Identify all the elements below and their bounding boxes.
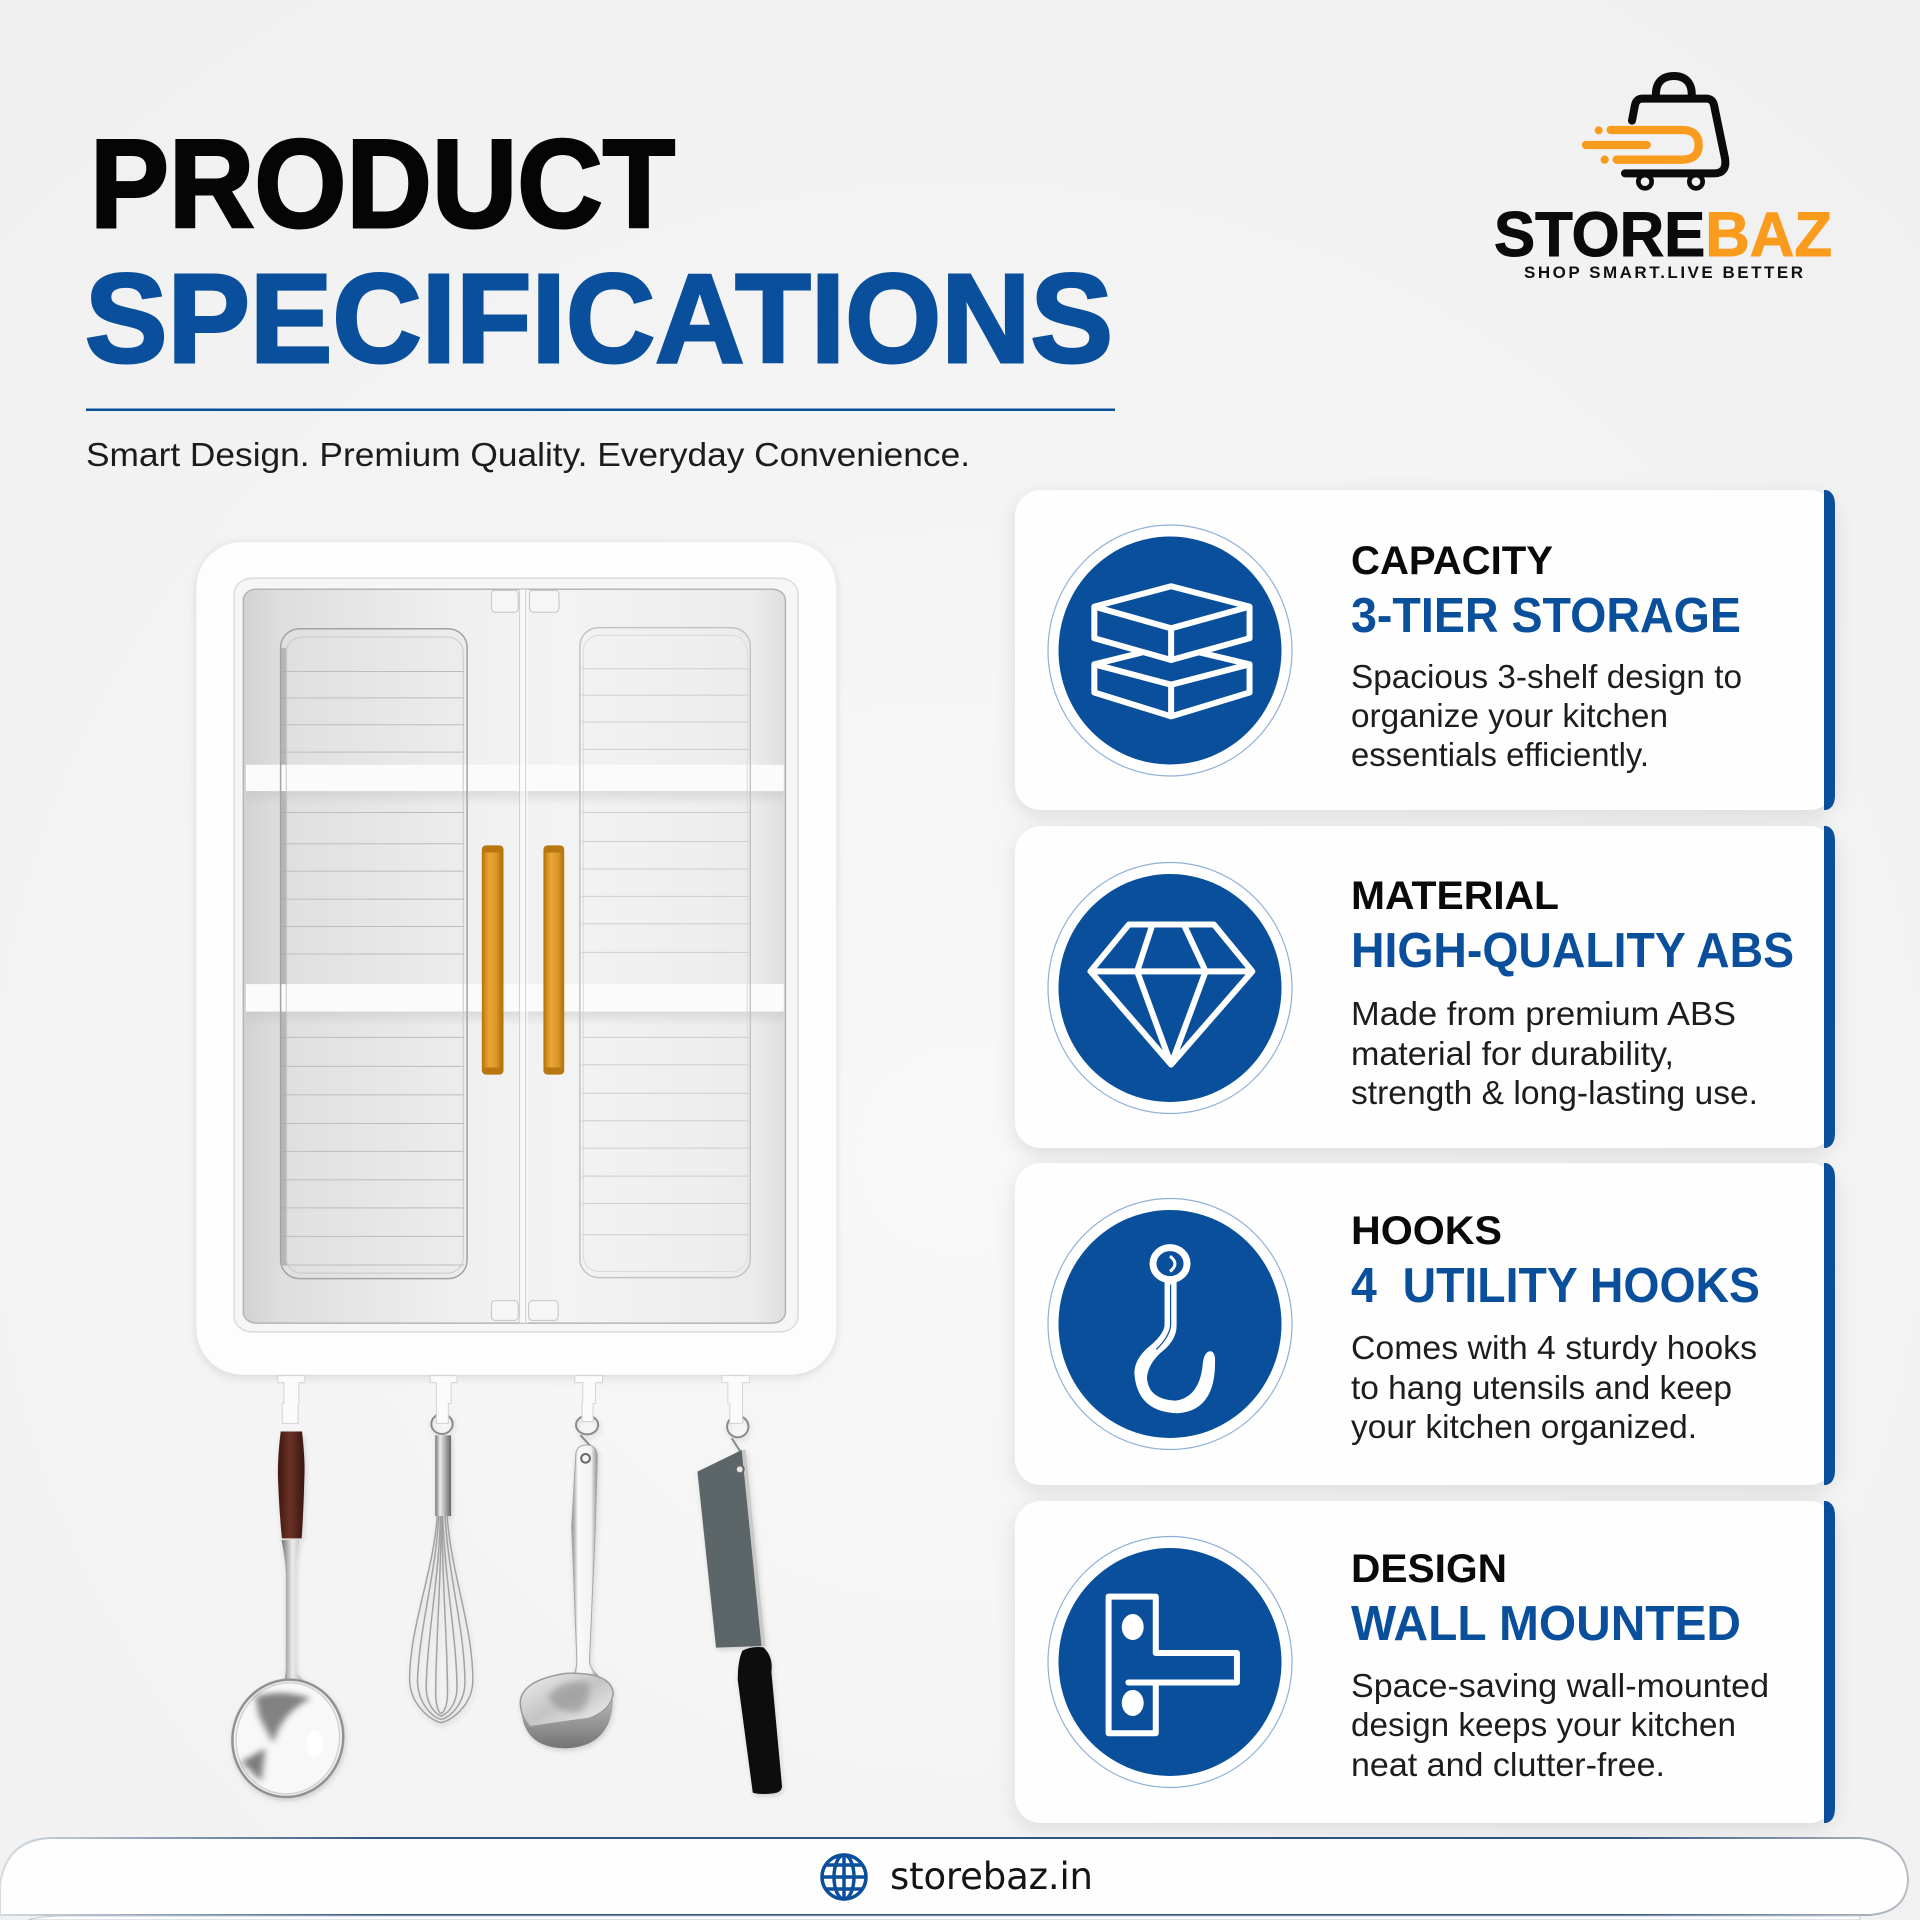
center door seam [520,589,528,1323]
card text: to hang utensils and keep [1351,1369,1732,1406]
icon: hook [1048,1198,1292,1450]
panel: design [1015,1501,1835,1823]
card text [1351,1547,1769,1783]
icon: shopping bag with speed lines [1586,76,1725,188]
card text: material for durability, [1351,1035,1674,1072]
panel: capacity [1015,490,1835,810]
cabinet [196,542,836,1375]
product illustration: wall cabinet with utensils [196,542,836,1800]
card text: Space-saving wall-mounted [1351,1667,1769,1704]
card text: organize your kitchen [1351,697,1668,734]
left door rack [281,629,467,1279]
card text: essentials efficiently. [1351,736,1649,773]
brand name: STOREBAZ [1494,200,1832,270]
gold handles [482,845,564,1075]
card text: HIGH-QUALITY ABS [1351,924,1794,978]
website address: storebaz.in [890,1855,1093,1898]
icon: wall mount bracket [1048,1536,1292,1788]
tagline: Smart Design. Premium Quality. Everyday Convenience. [86,436,970,473]
logo: Storebaz [1494,76,1832,282]
card background [1015,1163,1835,1485]
card background [1015,1501,1835,1823]
card text: MATERIAL [1351,874,1559,918]
whisk [410,1414,473,1723]
icon: diamond [1048,862,1292,1114]
card background [1015,490,1835,810]
title [85,115,1113,389]
spoon [228,1432,348,1800]
shelves [246,765,784,1026]
icon: globe [822,1855,866,1899]
footer bar [0,1838,1908,1920]
card text: Comes with 4 sturdy hooks [1351,1329,1757,1366]
card text: strength & long-lasting use. [1351,1074,1758,1111]
right door rack [580,628,750,1278]
card text: 4 UTILITY HOOKS [1351,1259,1760,1313]
card text [1351,539,1742,773]
door hinges [491,590,559,1320]
cleaver knife [697,1416,782,1794]
panel: material [1015,826,1835,1148]
card text: neat and clutter-free. [1351,1746,1665,1783]
rack outlines [281,628,750,1279]
card text: design keeps your kitchen [1351,1706,1736,1743]
card text: CAPACITY [1351,539,1553,583]
cabinet frame [196,542,836,1375]
card text: Spacious 3-shelf design to [1351,658,1742,695]
title: PRODUCT [90,115,675,254]
card background [1015,826,1835,1148]
panel: hooks [1015,1163,1835,1485]
icon: stacked tiers [1048,525,1292,776]
brand slogan: SHOP SMART.LIVE BETTER [1524,263,1803,282]
card text: 3-TIER STORAGE [1351,589,1741,643]
ladle [520,1416,613,1748]
card text: HOOKS [1351,1209,1502,1253]
title: SPECIFICATIONS [85,248,1113,389]
card text [1351,874,1794,1111]
title underline [86,408,1115,411]
card text [1351,1209,1760,1445]
card text: Made from premium ABS [1351,995,1736,1032]
wall hooks [278,1376,750,1423]
card text: DESIGN [1351,1547,1507,1591]
card text: WALL MOUNTED [1351,1597,1741,1651]
cabinet interior [243,589,785,1323]
cabinet opening [234,578,798,1332]
card text: your kitchen organized. [1351,1408,1697,1445]
